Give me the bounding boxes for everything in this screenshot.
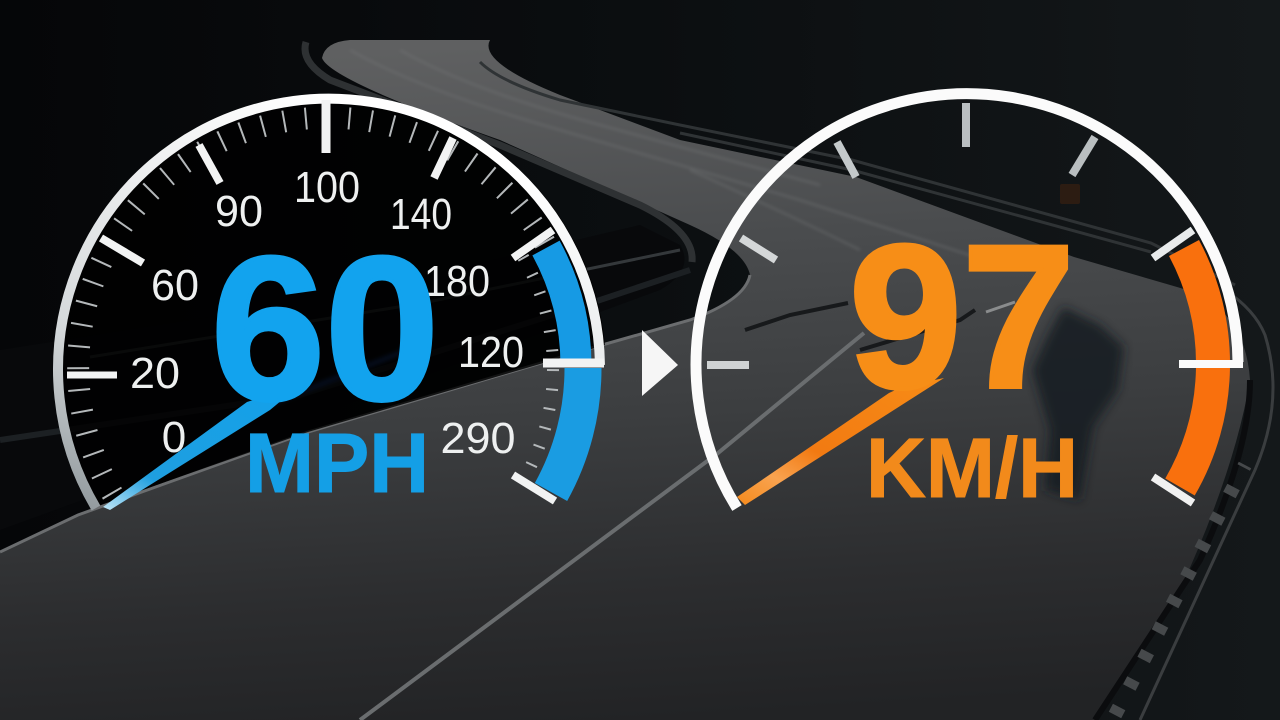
needle	[103, 385, 300, 510]
gauge face darkening	[54, 94, 605, 508]
gauge rim	[696, 94, 1238, 508]
outer rim	[58, 99, 600, 508]
orange speed arc	[1180, 248, 1213, 487]
distant road sign	[1060, 184, 1080, 204]
scale labels: 140	[390, 190, 452, 239]
lane line	[360, 333, 864, 720]
panel: 97 KM/H gauge	[696, 94, 1243, 515]
wet patch	[1032, 307, 1124, 500]
major ticks	[707, 103, 1243, 503]
road edge line	[0, 275, 750, 552]
minor ticks	[78, 118, 545, 494]
blue speed arc	[546, 248, 576, 365]
scale labels: 120	[458, 328, 524, 377]
scale labels: 100	[294, 163, 360, 212]
unit: MPH: MPH	[245, 416, 429, 510]
road streaks	[350, 50, 1000, 265]
guardrail right	[1140, 290, 1273, 720]
dark inner shoulder	[0, 225, 684, 530]
scale labels	[130, 163, 524, 463]
blue speed arc, lower section	[551, 368, 583, 492]
needle	[737, 378, 944, 505]
scale labels: 290	[440, 414, 516, 463]
guardrail upper right	[480, 62, 1235, 285]
value: 97: 97	[849, 203, 1075, 431]
major ticks	[67, 100, 604, 501]
arrow between gauges	[642, 330, 678, 396]
panel: 60 MPH gauge	[54, 94, 605, 510]
guardrail left	[305, 42, 692, 262]
scale labels: 90	[215, 187, 263, 236]
unit: KM/H: KM/H	[866, 421, 1078, 515]
scale labels: 180	[424, 257, 490, 306]
scale labels: 60	[151, 261, 199, 310]
scale labels: 0	[162, 413, 186, 462]
scale labels: 20	[130, 349, 180, 398]
road cracks	[745, 303, 975, 350]
value: 60: 60	[211, 215, 439, 443]
